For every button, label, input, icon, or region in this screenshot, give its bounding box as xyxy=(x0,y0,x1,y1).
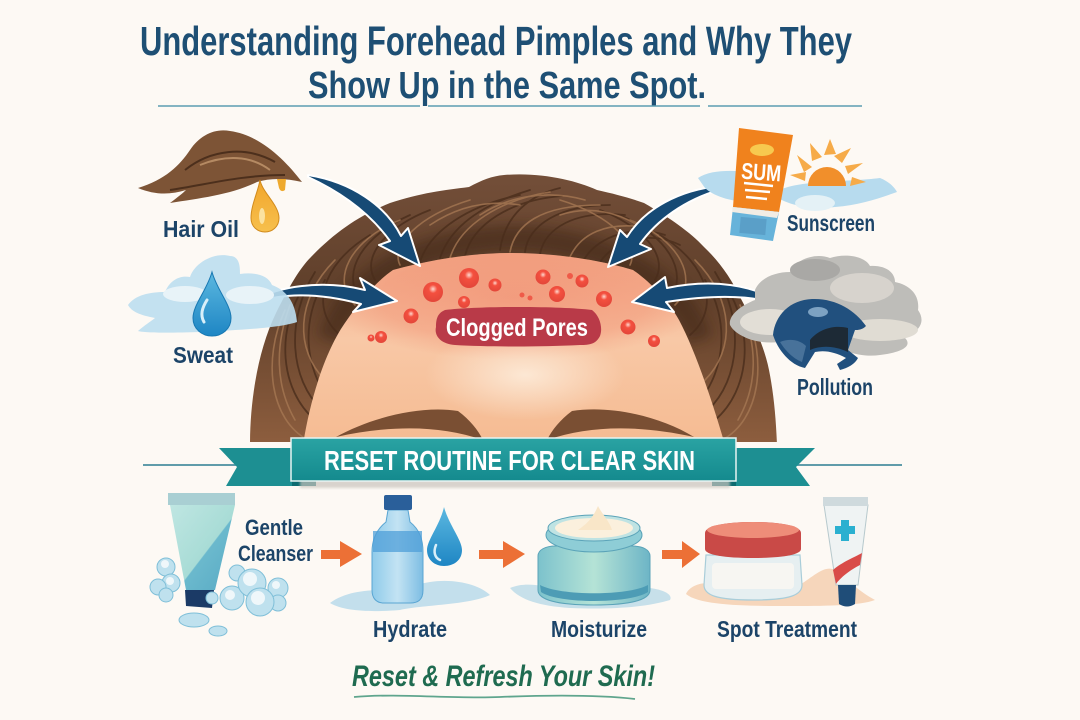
arrow: step 2 to 3 xyxy=(479,541,525,568)
banner: reset routine xyxy=(219,438,815,488)
clogged pores label xyxy=(436,307,601,346)
jar xyxy=(704,555,802,600)
redness across hairline xyxy=(351,253,676,350)
ribbon shadow xyxy=(300,480,730,488)
illustration: head and forehead xyxy=(240,165,790,450)
step: gentle cleanser: Cleanser xyxy=(238,541,313,566)
title xyxy=(140,18,862,107)
ribbon tails xyxy=(219,448,300,486)
arrow: sweat to forehead xyxy=(242,278,397,312)
step: moisturize xyxy=(510,506,671,642)
label: Sweat: Sweat xyxy=(173,342,233,368)
jar body xyxy=(538,546,650,605)
title: Understanding Forehead Pimples and Why They xyxy=(140,18,852,64)
cloud xyxy=(128,255,297,333)
splash xyxy=(510,585,671,609)
icon: sweat cloud and drop xyxy=(128,255,297,336)
arrow: pollution to forehead xyxy=(632,277,787,312)
sun xyxy=(808,167,846,186)
peach splash xyxy=(686,569,875,606)
forehead highlight xyxy=(440,345,609,414)
helmet xyxy=(773,299,866,370)
step: gentle cleanser xyxy=(150,493,313,636)
cleanser tube xyxy=(170,505,235,590)
small tube xyxy=(824,505,868,585)
arrow: sunscreen to forehead xyxy=(608,186,719,267)
icon: sunscreen and sun xyxy=(698,128,897,241)
icon: hair oil xyxy=(138,130,302,232)
step: spot treatment: Spot Treatment xyxy=(717,616,857,642)
banner: reset routine: RESET ROUTINE FOR CLEAR SKIN xyxy=(324,445,695,476)
step: moisturize: Moisturize xyxy=(551,616,647,642)
step: gentle cleanser: Gentle xyxy=(245,515,303,540)
water bottle xyxy=(372,510,423,603)
left eyebrow xyxy=(336,410,483,440)
hair lock xyxy=(138,130,302,203)
label: Hair Oil: Hair Oil xyxy=(163,216,239,242)
label: Pollution: Pollution xyxy=(797,374,873,400)
infographic canvas xyxy=(128,26,922,700)
step: hydrate xyxy=(330,495,490,642)
oil drop xyxy=(251,180,279,232)
arrow: step 3 to 4 xyxy=(662,541,700,568)
closing tagline: Reset & Refresh Your Skin! xyxy=(352,660,655,693)
soft dark band near hairline xyxy=(330,238,700,340)
icon: sunscreen and sun: SUM xyxy=(740,158,782,186)
sunscreen tube xyxy=(733,128,793,212)
water splash xyxy=(330,581,490,611)
arrow: step 1 to 2 xyxy=(321,541,362,567)
sweat drop xyxy=(193,272,231,336)
step: hydrate: Hydrate xyxy=(373,616,447,642)
clogged pores label: Clogged Pores xyxy=(446,314,588,342)
water drop xyxy=(427,507,462,566)
jar lid xyxy=(546,518,642,552)
smoke cloud xyxy=(730,256,922,356)
cream xyxy=(555,518,633,538)
label: Sunscreen: Sunscreen xyxy=(787,210,875,236)
hair xyxy=(240,165,790,450)
closing tagline xyxy=(352,660,655,699)
right eyebrow xyxy=(547,409,694,440)
foam bubbles xyxy=(150,558,288,636)
ribbon centre xyxy=(291,438,736,481)
forehead skin xyxy=(303,253,725,445)
title: Show Up in the Same Spot. xyxy=(308,65,706,107)
divider lines xyxy=(143,464,902,466)
icon: pollution smoke and helmet xyxy=(730,256,922,370)
pimples xyxy=(368,268,660,347)
arrow: hair oil to forehead xyxy=(308,175,420,266)
sky cloud xyxy=(698,171,897,208)
step: spot treatment xyxy=(686,497,875,642)
